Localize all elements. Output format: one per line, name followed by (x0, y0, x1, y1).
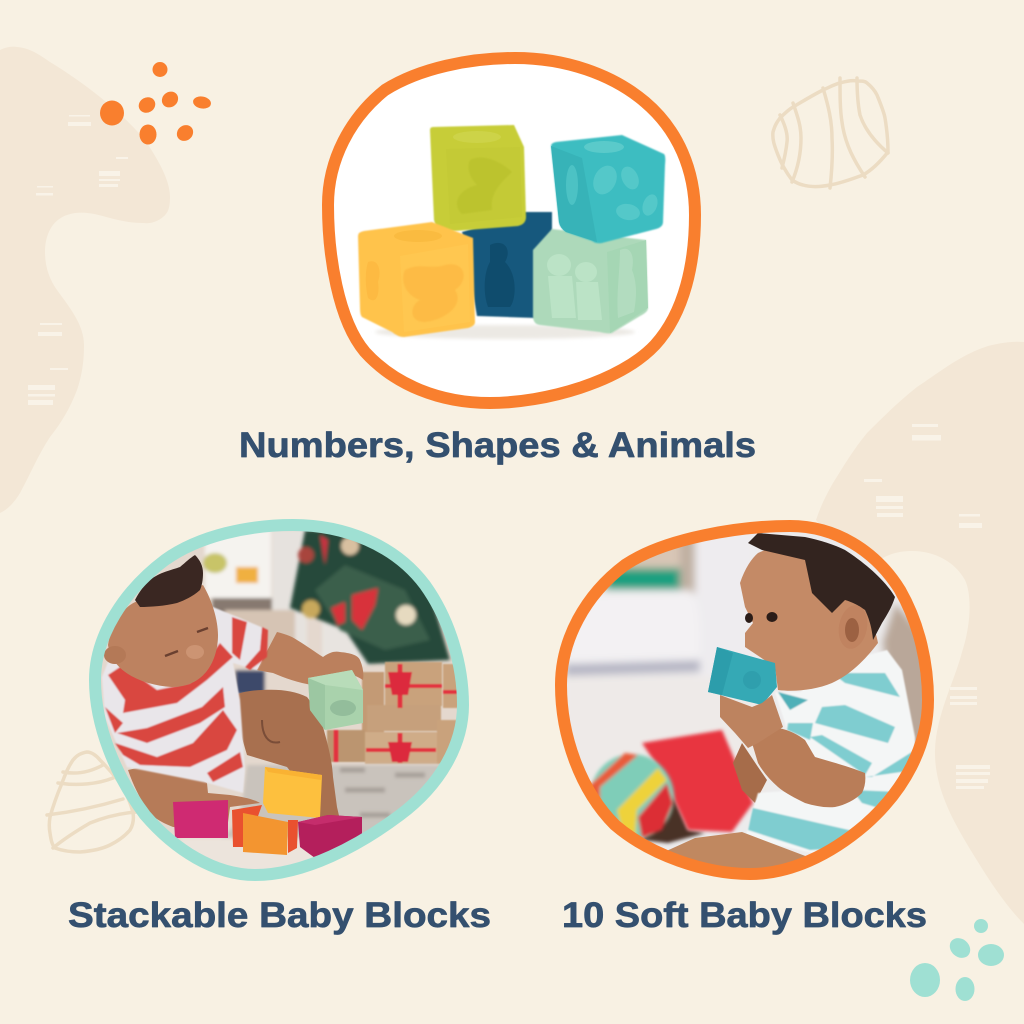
decorative orange dots (100, 62, 212, 144)
baby arm (257, 632, 363, 685)
top panel: product photo of blocks (328, 58, 695, 403)
red pillow (642, 730, 753, 832)
soft shadow under blocks (375, 325, 635, 339)
striped shirt (102, 607, 268, 793)
rug (181, 762, 440, 869)
left panel: baby stacking blocks photo (90, 520, 470, 880)
christmas tree (290, 530, 450, 664)
right panel: baby chewing block photo (555, 520, 935, 880)
stacked blocks on rug (173, 767, 362, 858)
mint block in hand (308, 670, 363, 730)
background blob: left (0, 47, 170, 513)
lime block (430, 125, 526, 232)
right caption: 10 Soft Baby Blocks (562, 896, 927, 935)
doodle: striped shell top right (773, 78, 888, 188)
baby legs (128, 690, 339, 828)
striped shirt (745, 650, 916, 855)
left caption: Stackable Baby Blocks (68, 896, 491, 935)
striped ball (588, 753, 674, 840)
scene background (101, 532, 457, 840)
baby leg (668, 832, 806, 868)
teal block at mouth (708, 647, 777, 705)
gift boxes (327, 662, 463, 764)
top caption: Numbers, Shapes & Animals (239, 426, 756, 465)
orange-yellow block (358, 222, 475, 337)
navy block (462, 212, 552, 318)
baby hand (720, 695, 783, 748)
teal block (551, 135, 665, 243)
baby forearm behind (733, 743, 767, 803)
mint block (533, 229, 648, 333)
doodle: striped shell bottom left (47, 752, 137, 852)
scene background (568, 543, 922, 744)
baby head (740, 533, 895, 691)
baby head (104, 555, 218, 687)
dark gap under pillow (642, 793, 705, 843)
decorative teal dots (910, 919, 1004, 1001)
background blob: right (816, 342, 1024, 924)
baby upper arm (752, 728, 865, 807)
